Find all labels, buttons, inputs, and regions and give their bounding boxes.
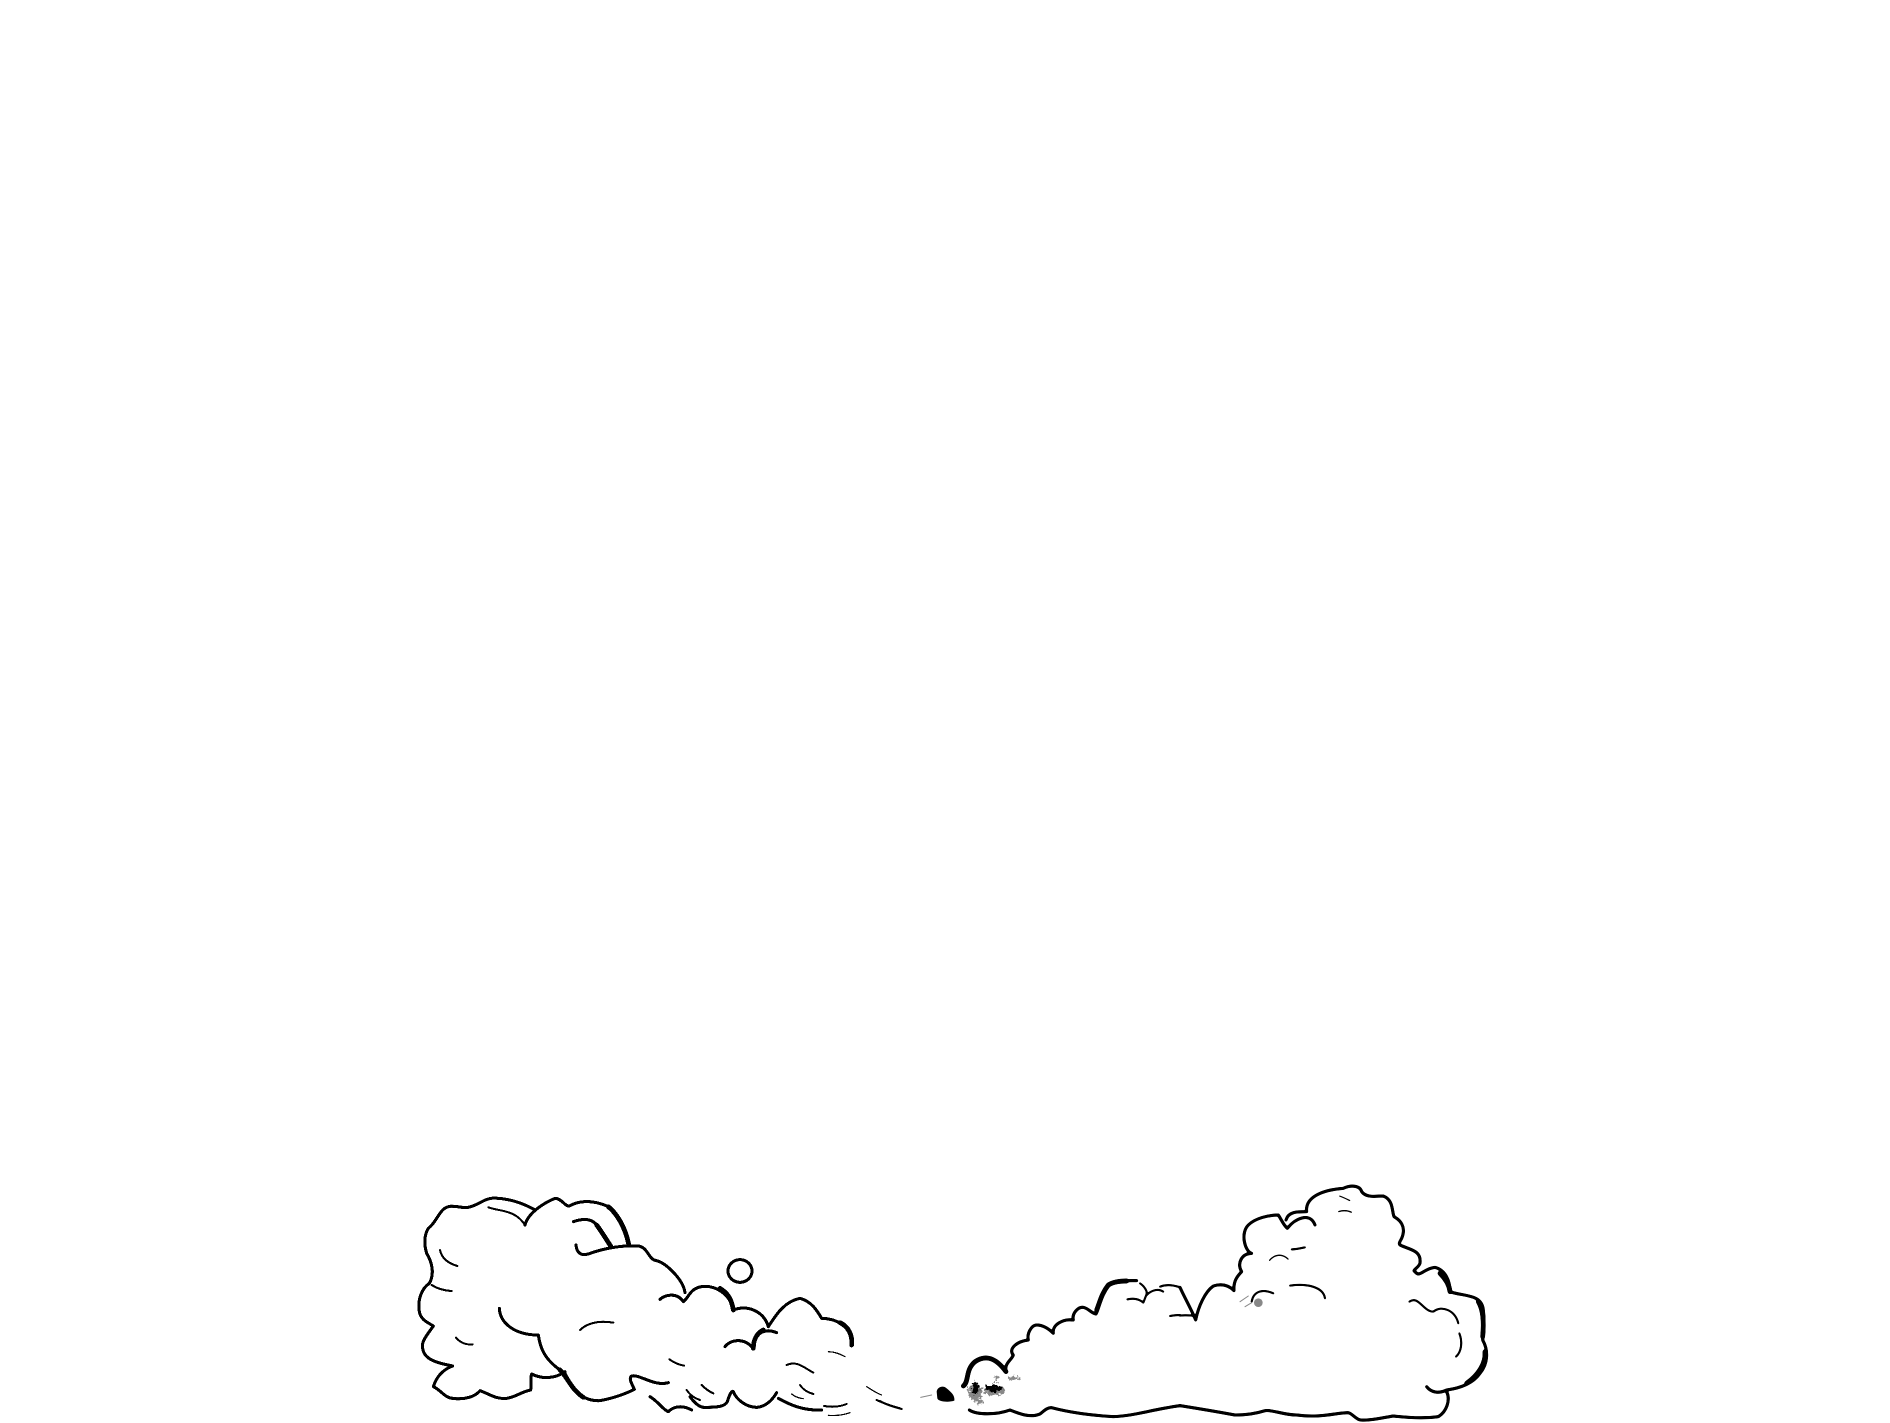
right cloud: main tower outline xyxy=(1180,1186,1487,1420)
bubble xyxy=(728,1260,752,1282)
right cloud illustration xyxy=(963,1186,1487,1420)
central ink spots and trail xyxy=(880,1376,1020,1409)
left cloud: inner shading strokes xyxy=(432,1250,684,1366)
gray smudge left of blob xyxy=(921,1395,932,1397)
right cloud: left crest outline xyxy=(963,1281,1180,1417)
left cloud: trailing dust strokes xyxy=(650,1352,900,1416)
gray ink dot on right cloud xyxy=(1240,1296,1263,1307)
right cloud: inner shading strokes xyxy=(1252,1196,1461,1357)
left cloud: outer billow outline xyxy=(419,1198,852,1401)
trailing stroke xyxy=(880,1401,902,1409)
black ink blob xyxy=(937,1387,954,1402)
left cloud illustration xyxy=(419,1198,900,1416)
smudged ink speckle xyxy=(968,1376,1020,1405)
